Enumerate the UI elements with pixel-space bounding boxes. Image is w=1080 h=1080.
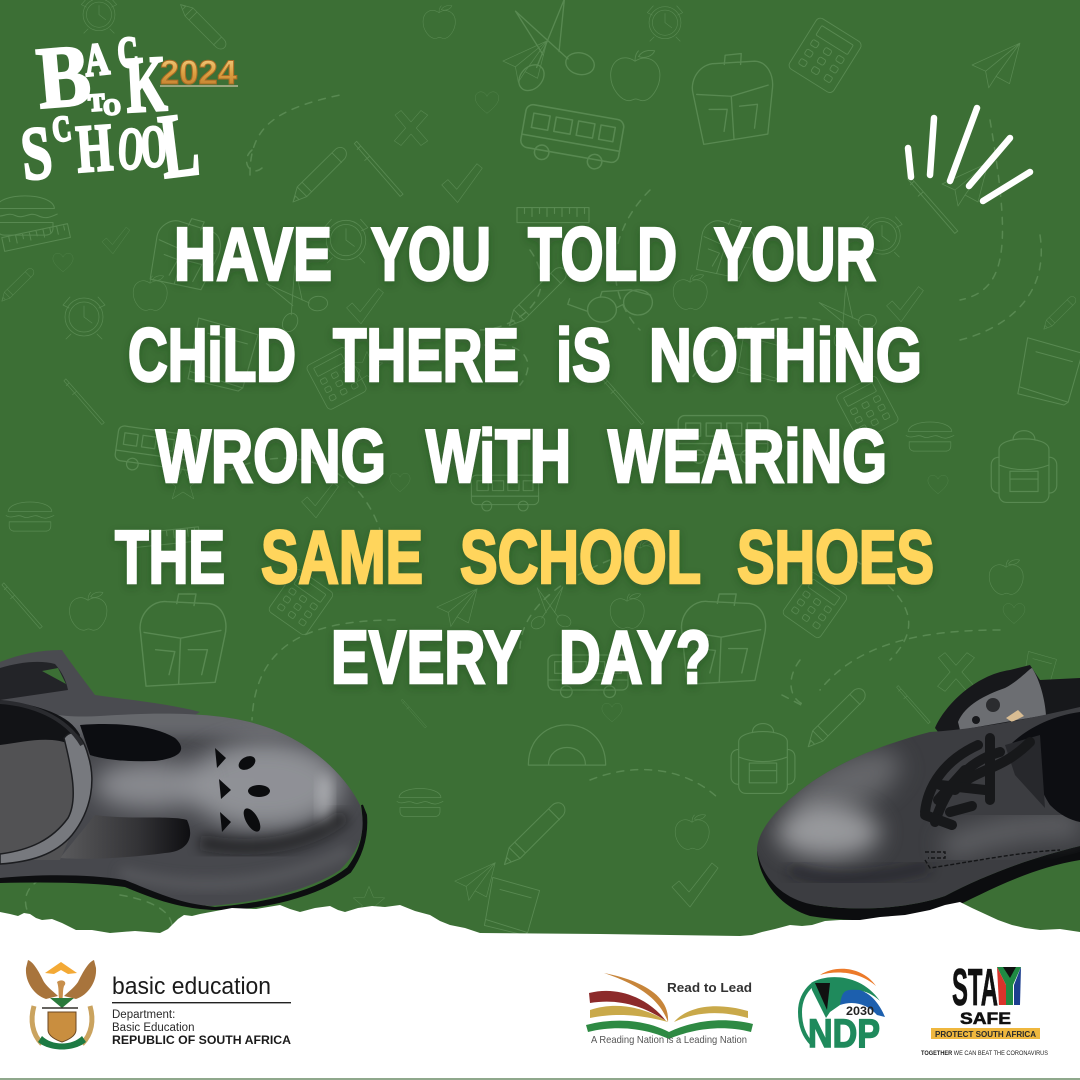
heading line 5: EVERY: [331, 615, 521, 699]
logo lettering: T: [88, 90, 105, 117]
logo lettering: K: [123, 39, 169, 130]
logo lettering: O: [103, 94, 121, 120]
heading line 1: [174, 212, 876, 296]
NDP wordmark: NDP: [808, 1012, 880, 1056]
logo lettering: O: [116, 116, 145, 183]
shoe body: [0, 700, 363, 906]
heading line 4: SCHOOL: [460, 515, 701, 599]
tagline: A Reading Nation is a Leading Nation: [591, 1034, 747, 1046]
logo lettering: S: [17, 111, 56, 197]
upper slot opening: [80, 724, 181, 761]
flag-coloured Y: [997, 967, 1021, 1005]
logo lettering: L: [154, 92, 204, 198]
protect banner: [931, 1028, 1040, 1039]
heading line 4: THE: [115, 515, 225, 599]
heading line 3: [156, 414, 887, 498]
icon: burst lines: [908, 108, 1030, 201]
heading line 2: [128, 313, 922, 397]
heading line 3: WiTH: [426, 414, 571, 498]
logo: Department of Basic Education: Basic Education: [112, 1022, 194, 1034]
NDP green flag band: [811, 977, 880, 1018]
logo lettering: [17, 26, 204, 198]
heading line 1: YOU: [371, 212, 491, 296]
logo lettering: A: [82, 33, 112, 86]
collar and tongue: [935, 665, 1080, 760]
department lines: Department:: [112, 1009, 175, 1021]
heading line 3: WRONG: [156, 414, 386, 498]
heading line 4: SHOES: [737, 515, 934, 599]
stitching: [925, 850, 1060, 868]
logo: Stay Safe: PROTECT SOUTH AFRICA: [935, 1030, 1036, 1039]
footer bottom edge line: [0, 1078, 1080, 1080]
logo lettering: C: [50, 108, 74, 150]
laces: [925, 738, 1030, 825]
heading line 2: iS: [556, 313, 611, 397]
right shoe: black lace-up school shoe: [757, 665, 1080, 920]
lower slot opening: [60, 815, 190, 859]
torn white paper footer: [0, 902, 1080, 1080]
shoe body: [757, 707, 1080, 908]
heading line 4: [115, 515, 934, 599]
logo: Department of Basic Education: REPUBLIC OF SOUTH AFRICA: [112, 1035, 291, 1047]
heading line 5: DAY?: [559, 615, 711, 699]
emblem: coat of arms: [26, 960, 96, 1050]
heading line 4: SAME: [261, 515, 423, 599]
sole: [0, 805, 366, 909]
logo: Stay Safe: STA: [952, 959, 998, 1017]
logo year 2024: 2024: [160, 54, 237, 92]
leather shading, clipped to shoe: [58, 714, 353, 890]
insole: [0, 705, 90, 860]
coronavirus tagline: TOGETHER WE CAN BEAT THE CORONAVIRUS: [921, 1051, 1048, 1057]
inner opening: [1010, 712, 1080, 822]
SAFE wordmark: SAFE: [960, 1009, 1011, 1028]
NDP left ring: [800, 985, 812, 1044]
logo lettering: B: [33, 26, 94, 128]
logo lettering: O: [139, 114, 168, 181]
open book arcs: [604, 973, 668, 1022]
left shoe: black T-bar school shoe: [0, 650, 380, 909]
back strap: [0, 650, 200, 760]
logo lettering: C: [115, 28, 141, 79]
punched pattern: [215, 748, 270, 834]
heading line 1: YOUR: [714, 212, 876, 296]
heading line 2: CHiLD: [128, 313, 296, 397]
sole: [757, 846, 1080, 920]
side strap: [0, 733, 92, 864]
heading line 1: HAVE: [174, 212, 332, 296]
logo lettering: H: [74, 109, 115, 187]
heading line 5: [331, 615, 711, 699]
read to lead name: Read to Lead: [667, 980, 752, 995]
heading line 1: TOLD: [528, 212, 677, 296]
logo: NDP 2030: [800, 969, 885, 1056]
wordmark: basic education: [112, 973, 271, 1000]
logo: Read to Lead: [586, 973, 753, 1046]
heading question: [115, 212, 934, 699]
NDP year: 2030: [846, 1004, 874, 1018]
leather shading, clipped to shoe: [776, 736, 1080, 879]
logo: Back to School 2024: [17, 26, 238, 198]
logo: Stay Safe: [921, 959, 1048, 1057]
heading line 2: THERE: [333, 313, 519, 397]
heading line 3: WEARiNG: [608, 414, 887, 498]
logo: Department of Basic Education: [26, 960, 291, 1050]
heading line 2: NOTHiNG: [649, 313, 922, 397]
